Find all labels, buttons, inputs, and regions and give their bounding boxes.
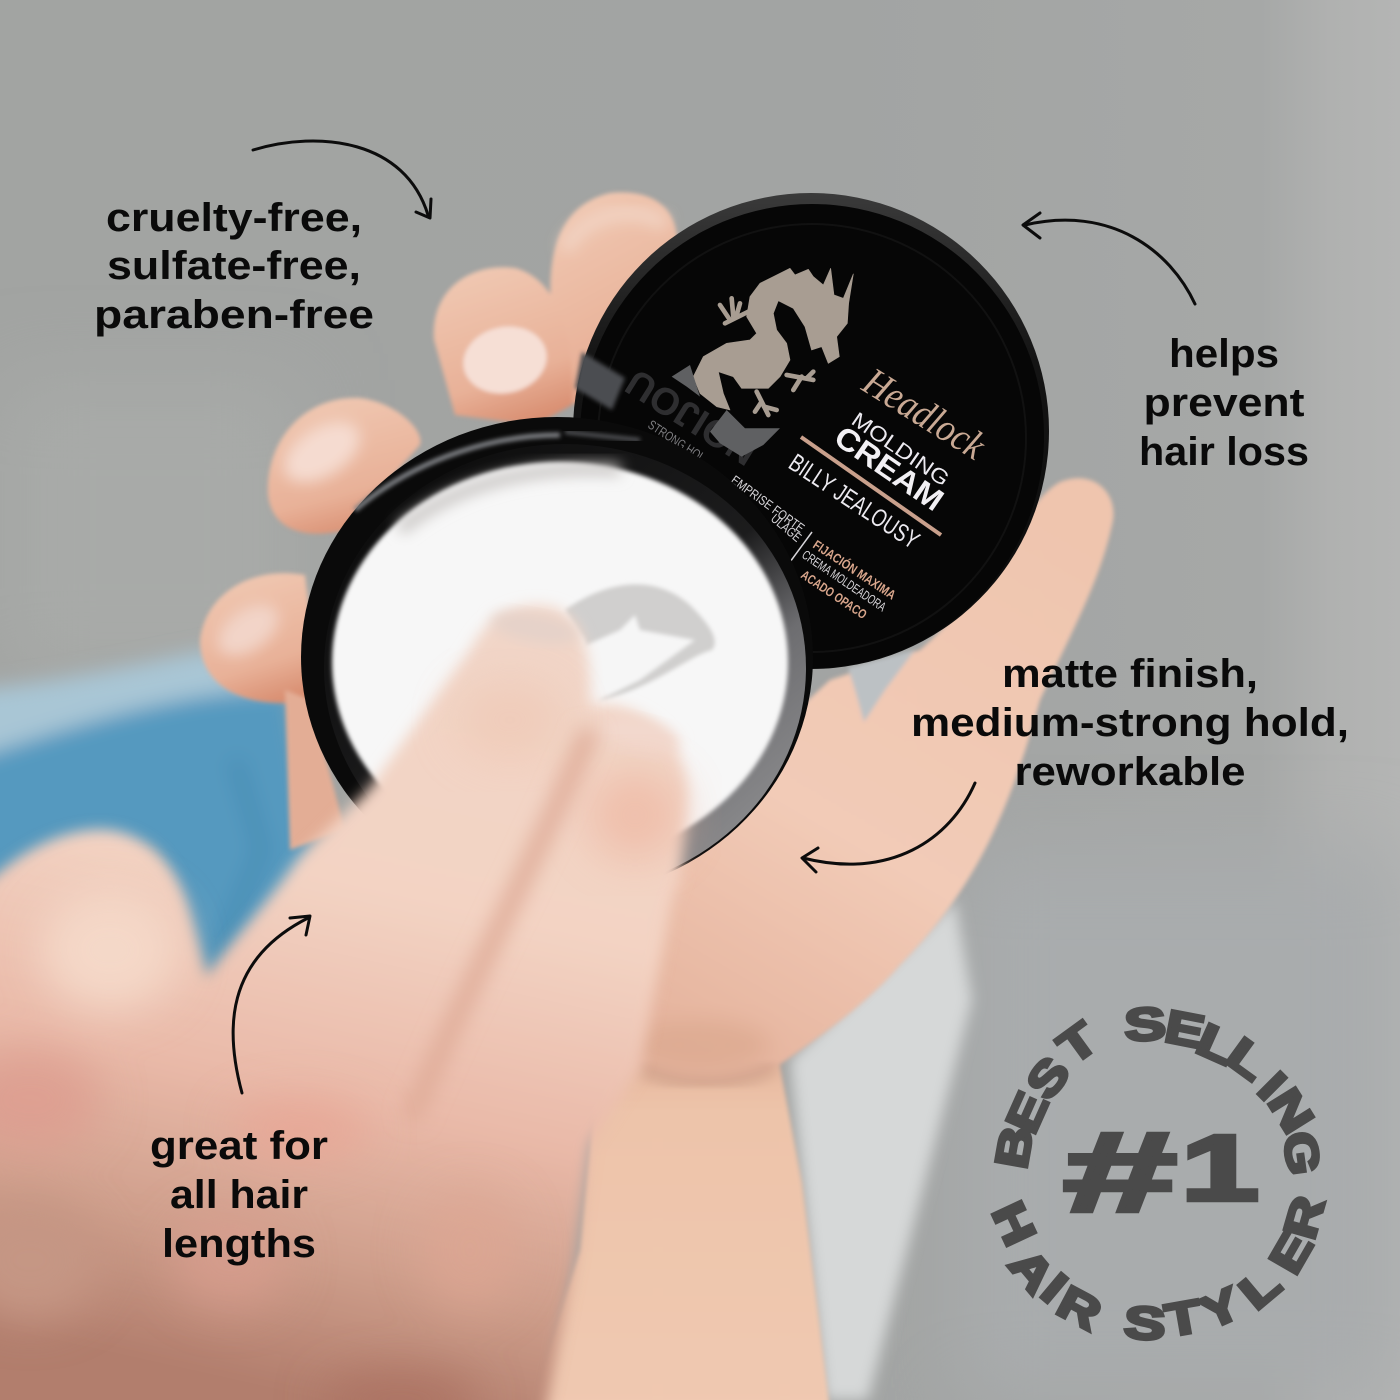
finger separation (410, 730, 590, 1120)
knuckle blush (0, 890, 520, 1400)
label: Headlock: Headlock (854, 358, 994, 469)
palm (600, 478, 1113, 1083)
badge: best selling hair styler: L (1230, 1257, 1291, 1320)
badge: best selling hair styler: I (1032, 1263, 1077, 1313)
third finger (268, 398, 421, 534)
third fingernail (274, 409, 370, 495)
arrow: bottom left (233, 916, 310, 1093)
label: small print: STRONG HOL (645, 417, 708, 465)
badge: best selling hair styler: E (1161, 1001, 1208, 1059)
label: divider bar (801, 437, 941, 535)
badge: best selling hair styler (981, 998, 1335, 1350)
badge number: 1 (1181, 1117, 1259, 1220)
label: small print (645, 417, 899, 622)
fourth finger (200, 573, 320, 703)
badge: best selling hair styler: E (997, 1085, 1059, 1141)
callout: cruelty-free: paraben-free (94, 293, 374, 337)
arrow: top left (253, 141, 431, 218)
fingertip tone (488, 606, 582, 650)
top finger (550, 192, 677, 420)
badge: best selling hair styler: R (1275, 1191, 1335, 1245)
label: small print: ULAGE (768, 511, 805, 545)
product lid (573, 193, 1049, 669)
label: CREAM: CREAM (828, 419, 950, 518)
badge: best selling hair styler: R (1049, 1276, 1109, 1341)
jar highlight (355, 435, 560, 510)
product lid: NOIJOU (619, 360, 765, 473)
badge: best selling hair styler: T (1049, 1012, 1108, 1075)
fourth fingernail (209, 594, 287, 666)
cream (332, 462, 788, 862)
callout: matte finish: medium-strong hold, (911, 701, 1349, 745)
badge: best selling hair styler: S (1123, 1297, 1167, 1350)
callout: helps prevent hair loss: prevent (1144, 381, 1304, 425)
callout: helps prevent hair loss (1139, 332, 1309, 474)
badge: best selling hair styler: S (1123, 998, 1167, 1051)
second fingernail (457, 319, 553, 401)
label: small print: EMPRISE FORTE (728, 472, 808, 536)
callout: matte finish: matte finish, (1002, 652, 1258, 696)
badge: best selling hair styler: H (981, 1194, 1045, 1253)
jar inner rim (324, 444, 806, 892)
jar body (301, 417, 813, 897)
badge: best selling hair styler: L (1217, 1028, 1277, 1091)
callout: great for all hair lengths: great for (150, 1124, 328, 1168)
badge: best selling hair styler: A (999, 1239, 1064, 1304)
badge number: # (1063, 1109, 1177, 1235)
callout: cruelty-free: cruelty-free, (106, 196, 362, 240)
lid disc (573, 193, 1049, 669)
cream smear (565, 584, 715, 700)
label: MOLDING: MOLDING (847, 408, 953, 491)
callout: helps prevent hair loss: helps (1169, 332, 1279, 376)
holding hand (200, 192, 1113, 1400)
badge: best selling hair styler: S (1017, 1047, 1081, 1109)
badge: best selling hair styler: I (1249, 1062, 1296, 1109)
callout: great for all hair lengths: lengths (162, 1222, 316, 1266)
arrow: top right (1023, 213, 1195, 304)
label: small print: ACADO OPACO (798, 567, 870, 622)
label: small print: FIJACIÓN MAXIMA (810, 537, 899, 603)
foreground blurred hand (0, 606, 688, 1400)
background: pale fabric (790, 900, 972, 1400)
dragon logo (672, 268, 853, 457)
badge: best selling hair styler: Y (1193, 1278, 1249, 1340)
callout: matte finish: reworkable (1014, 750, 1246, 794)
badge number (1063, 1109, 1259, 1235)
badge: best selling hair styler: E (1260, 1224, 1323, 1282)
badge: best selling hair styler: N (1258, 1080, 1323, 1142)
callout: cruelty-free: sulfate-free, (107, 244, 361, 288)
callout: matte finish (911, 652, 1349, 794)
arrow: middle right (802, 783, 975, 872)
badge: best selling hair styler: B (986, 1122, 1044, 1172)
background: blue jeans (0, 640, 320, 985)
lid reflection (575, 352, 625, 410)
badge: best selling hair styler: T (1162, 1291, 1205, 1347)
cream jar (301, 417, 813, 897)
palm crease shadow (640, 1066, 775, 1084)
callout: helps prevent hair loss: hair loss (1139, 430, 1309, 474)
callout: cruelty-free (94, 196, 374, 337)
label: small print: CREMA MOLDEADORA (799, 547, 889, 614)
label: BILLY JEALOUSY: BILLY JEALOUSY (784, 449, 924, 555)
badge: best selling hair styler: L (1189, 1014, 1243, 1075)
badge: best selling hair styler: G (1273, 1128, 1330, 1178)
callout: great for all hair lengths (150, 1124, 328, 1266)
second finger (434, 267, 572, 425)
gap between thumb and palm (848, 650, 915, 722)
callout: great for all hair lengths: all hair (170, 1173, 308, 1217)
wrist (530, 1040, 830, 1400)
